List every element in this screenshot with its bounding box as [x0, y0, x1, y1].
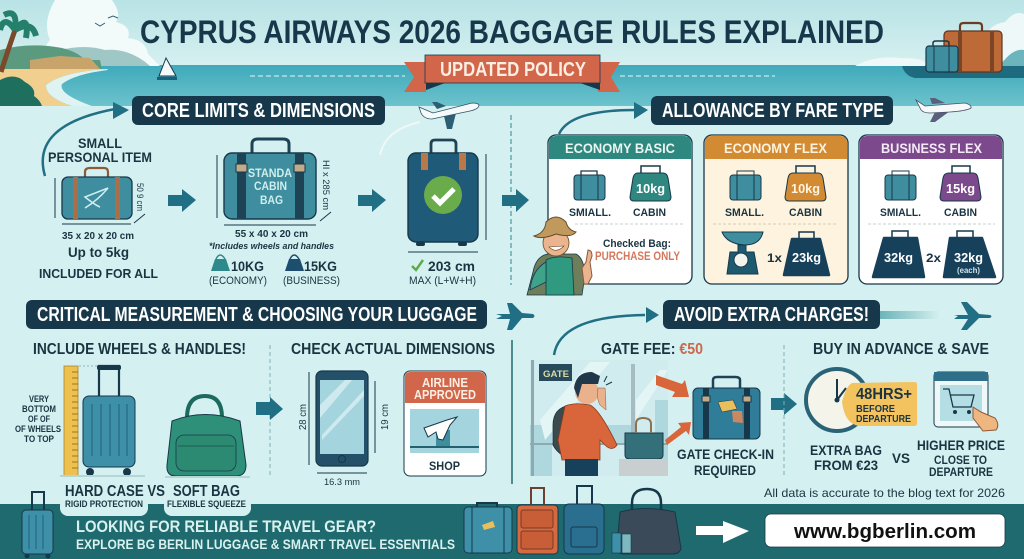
card: economy flex: CABIN	[789, 207, 822, 219]
standard cabin bag: CABIN	[254, 181, 287, 193]
card: business flex: 2x	[926, 251, 941, 265]
card: business flex	[859, 135, 1003, 284]
curve arrow: allowance	[559, 102, 648, 134]
standard cabin bag: 15KG	[304, 258, 337, 274]
card: economy basic: Checked Bag:	[603, 238, 671, 250]
standard cabin bag: STANDA	[248, 168, 292, 180]
price comparison text: CLOSE TO	[934, 453, 987, 467]
small personal item: 35 x 20 x 20 cm	[62, 230, 134, 242]
small personal item: 50 9 cm	[135, 183, 145, 211]
measure note: BOTTOM	[22, 404, 56, 414]
buy in advance: BUY IN ADVANCE & SAVE	[813, 341, 989, 358]
standard cabin bag: (ECONOMY)	[209, 275, 267, 287]
standard cabin bag: (BUSINESS)	[283, 275, 340, 287]
airline approved sign: AIRLINE	[422, 376, 468, 390]
standard cabin bag: *Includes wheels and handles	[209, 241, 334, 252]
small personal item: Up to 5kg	[68, 244, 129, 260]
standard cabin bag: 10KG	[231, 258, 264, 274]
divider	[269, 345, 271, 475]
standard cabin bag	[209, 139, 340, 287]
bottom banner: EXPLORE BG BERLIN LUGGAGE & SMART TRAVEL ESSENTIALS	[76, 536, 455, 552]
title: CYPRUS AIRWAYS 2026 BAGGAGE RULES EXPLAINED	[140, 14, 884, 50]
card: economy basic: PURCHASE ONLY	[595, 249, 680, 263]
hard case suitcase	[60, 365, 145, 476]
measure note: TO TOP	[24, 434, 54, 444]
heading: critical measurement: CRITICAL MEASUREMENT & CHOOSING YOUR LUGGAGE	[37, 304, 477, 326]
ribbon: updated policy: UPDATED POLICY	[440, 59, 587, 81]
card: business flex: 15kg	[946, 181, 975, 196]
card: economy flex: 23kg	[792, 250, 821, 265]
small personal item: SMALL	[78, 135, 122, 151]
price comparison text: EXTRA BAG	[810, 442, 882, 458]
orange arrows	[656, 375, 691, 445]
label pills	[60, 497, 251, 516]
plane	[496, 303, 534, 330]
accuracy note: All data is accurate to the blog text for 2026	[764, 486, 1005, 500]
maximum size bag	[408, 140, 486, 287]
heading: allowance by fare type: ALLOWANCE BY FARE TYPE	[662, 100, 884, 122]
measure note: OF OF	[28, 414, 50, 424]
plane	[916, 98, 971, 122]
gate fee: GATE FEE: €50	[601, 341, 703, 358]
arrow	[771, 393, 797, 415]
arrow	[358, 189, 386, 212]
card: economy basic: ECONOMY BASIC	[565, 140, 675, 156]
hard case vs soft bag labels: SOFT BAG	[173, 483, 240, 500]
gate check-in bag: REQUIRED	[694, 462, 756, 478]
label pills: RIGID PROTECTION	[65, 499, 143, 510]
clock with 48 hours badge: 48HRS+	[856, 386, 912, 403]
subheading: check actual dimensions: CHECK ACTUAL DIMENSIONS	[291, 341, 495, 358]
clock with 48 hours badge: BEFORE	[856, 404, 895, 415]
small personal item	[39, 135, 158, 281]
card: economy flex: 10kg	[791, 181, 820, 196]
price comparison text	[810, 437, 1005, 479]
arrow	[502, 189, 529, 212]
standard cabin bag: BAG	[260, 195, 283, 207]
standard cabin bag: HI x 285 cm	[320, 160, 331, 210]
heading: avoid extra charges: AVOID EXTRA CHARGES!	[674, 304, 869, 326]
measure note: VERY	[29, 394, 49, 404]
url button	[765, 514, 1005, 547]
divider curve and arrow: core limits	[43, 102, 129, 176]
heading: core limits and dimensions: CORE LIMITS & DIMENSIONS	[142, 100, 375, 122]
label pills: FLEXIBLE SQUEEZE	[167, 499, 246, 509]
heading: critical measurement	[26, 300, 487, 329]
card: business flex: 32kg	[954, 250, 983, 265]
measure note	[15, 394, 61, 444]
airline approved sign	[404, 371, 486, 476]
price comparison text: VS	[892, 450, 910, 466]
phone with dimensions: 16.3 mm	[324, 477, 360, 487]
divider	[783, 345, 785, 475]
card: economy basic: SMIALL.	[569, 207, 611, 219]
bottom banner: LOOKING FOR RELIABLE TRAVEL GEAR?	[76, 517, 376, 536]
small personal item: PERSONAL ITEM	[48, 149, 152, 165]
hard case vs soft bag labels: HARD CASE VS	[65, 483, 165, 500]
traveller with thumbs up	[527, 217, 592, 295]
standard cabin bag: 55 x 40 x 20 cm	[235, 228, 308, 240]
ribbon: updated policy	[404, 55, 620, 92]
header scenery: sky, sea and beach	[0, 0, 1024, 106]
card: business flex: (each)	[957, 266, 980, 275]
banner suitcase left	[22, 492, 53, 558]
gate scene with worried traveller: GATE	[543, 369, 569, 380]
subheading: include wheels and handles: INCLUDE WHEELS & HANDLES!	[33, 341, 246, 358]
contrail and plane	[880, 302, 992, 330]
measure note: OF WHEELS	[15, 424, 61, 434]
white arrow	[696, 521, 749, 543]
price comparison text: FROM €23	[814, 457, 878, 473]
card: economy flex	[704, 135, 848, 284]
card: economy basic: 10kg	[636, 181, 665, 196]
online shop window icon	[934, 372, 998, 431]
curve arrow: avoid	[554, 307, 659, 355]
clock with 48 hours badge	[806, 369, 917, 431]
clock with 48 hours badge: DEPARTURE	[856, 414, 911, 425]
card: economy basic	[548, 135, 692, 284]
card: economy flex: 1x	[767, 251, 782, 265]
arrow	[168, 189, 196, 212]
card: business flex: BUSINESS FLEX	[881, 140, 983, 156]
divider	[510, 115, 512, 285]
heading: avoid extra charges	[663, 300, 880, 329]
heading: allowance by fare type	[651, 96, 893, 125]
phone with dimensions	[298, 371, 391, 487]
maximum size bag: MAX (L+W+H)	[409, 275, 476, 287]
airline approved sign: SHOP	[429, 459, 460, 473]
hard case vs soft bag labels	[65, 483, 240, 500]
phone with dimensions: 28 cm	[298, 404, 309, 430]
heading: core limits and dimensions	[132, 96, 385, 125]
small personal item: INCLUDED FOR ALL	[39, 266, 158, 281]
ruler	[64, 366, 97, 476]
bottom banner	[0, 497, 1024, 559]
header luggage illustration	[926, 23, 1002, 72]
soft bag	[165, 396, 250, 477]
gate check-in bag	[677, 377, 774, 478]
card: economy flex: ECONOMY FLEX	[724, 140, 828, 156]
vertical divider	[511, 340, 513, 484]
card: business flex: SMIALL.	[880, 207, 921, 219]
card: business flex: 32kg	[884, 250, 913, 265]
card: economy flex: SMALL.	[725, 207, 764, 219]
maximum size bag: 203 cm	[428, 258, 475, 274]
card: business flex: CABIN	[944, 207, 977, 219]
gate check-in bag: GATE CHECK-IN	[677, 446, 774, 462]
url button: www.bgberlin.com	[793, 521, 976, 543]
phone with dimensions: 19 cm	[380, 404, 391, 430]
price comparison text: HIGHER PRICE	[917, 437, 1005, 453]
card: economy basic: CABIN	[633, 207, 666, 219]
arrow	[256, 397, 283, 420]
gate scene with worried traveller	[530, 360, 668, 476]
plane and contrail	[380, 102, 479, 155]
price comparison text: DEPARTURE	[929, 465, 993, 479]
banner luggage group	[464, 486, 681, 554]
airline approved sign: APPROVED	[414, 388, 476, 402]
